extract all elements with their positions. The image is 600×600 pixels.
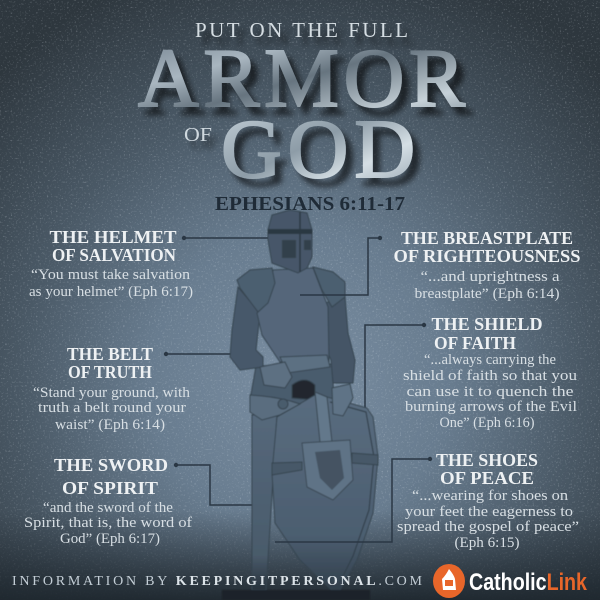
shield crest [302,440,353,500]
right hand [332,384,353,416]
quote: helmet: as your helmet” (Eph 6:17) [29,284,193,300]
lower body [250,364,334,430]
right arm [322,297,355,383]
connector: sword [176,465,255,505]
quote: belt: “Stand your ground, with [33,385,191,401]
heading line two: belt: OF TRUTH [68,362,152,382]
connector: helmet [184,237,268,239]
visor [268,229,312,234]
quote: shoes: “...wearing for shoes on [412,488,569,504]
breastplate [257,268,329,362]
panel: belt [33,344,191,433]
logo wordmark: CatholicLink [469,569,588,596]
connector dots [164,236,432,467]
quote: shield: burning arrows of the Evil [405,399,577,415]
connector: shoes [275,459,430,542]
quote: shield: can use it to quench the [406,384,574,400]
panel: shoes [397,450,579,551]
quote: breastplate: “...and uprightness a [420,269,560,285]
panel: sword [24,455,192,547]
quote: breastplate [414,269,560,302]
quote: shield: shield of faith so that you [403,368,577,384]
left arm [230,287,263,370]
quote: shoes: (Eph 6:15) [454,535,520,551]
panel: helmet [29,227,193,300]
heading line two: helmet: OF SALVATION [52,245,176,265]
footer credit: INFORMATION BY KEEPINGITPERSONAL.COM [12,574,423,589]
quote: shield: One” (Eph 6:16) [440,415,535,431]
panel: shield [403,314,577,431]
knight figure [222,210,378,600]
inner shield rim [330,402,374,588]
title word: god: GOD [221,103,415,196]
sword [252,415,277,590]
quote: shield [403,352,577,431]
title word: of: OF [184,124,212,146]
left pauldron [237,268,275,312]
quote: helmet [29,267,193,300]
heading: belt: THE BELT [67,344,153,364]
title word: armor: ARMOR [138,32,465,125]
heading: breastplate: THE BREASTPLATE [401,228,573,248]
right pauldron [313,267,345,307]
heading: shield: THE SHIELD [432,314,542,334]
heading line two: breastplate: OF RIGHTEOUSNESS [394,246,580,266]
connector lines [166,238,424,505]
connector: breastplate [300,238,380,295]
quote: sword: “and the sword of the [43,500,173,516]
panel: breastplate [394,228,580,302]
title line: put on the full: PUT ON THE FULL [195,18,408,42]
quote: sword: God” (Eph 6:17) [60,531,160,547]
quote: belt [33,385,191,433]
heading: helmet: THE HELMET [50,227,176,247]
quote: breastplate: breastplate” (Eph 6:14) [414,286,560,302]
quote: sword: Spirit, that is, the word of [24,515,192,531]
sword grip [278,399,288,409]
quote: shoes: your feet the eagerness to [405,504,573,520]
shield strap [315,392,332,442]
fauld opening [292,380,315,400]
connector overlays [275,238,430,542]
heading line two: sword: OF SPIRIT [62,478,158,498]
connector: shield [365,325,424,410]
crossguard with pommel [250,395,300,420]
visor breathing holes [282,240,311,258]
title [138,18,465,196]
quote: belt: truth a belt round your [38,400,186,416]
heading line two: shoes: OF PEACE [440,468,534,488]
shield bars [272,453,378,475]
shield [272,395,378,595]
scripture reference: EPHESIANS 6:11-17 [215,193,405,215]
quote: shoes: spread the gospel of peace” [397,519,579,535]
left hand [260,362,292,388]
heading line two: shield: OF FAITH [434,333,516,353]
quote: helmet: “You must take salvation [31,267,191,283]
connector: belt [166,354,262,363]
heading: shoes: THE SHOES [436,450,538,470]
quote: belt: waist” (Eph 6:14) [55,417,165,433]
icon: flame badge [433,564,465,598]
quote: sword [24,500,192,547]
helmet [268,210,312,273]
belt [280,355,330,373]
logo: CatholicLink [433,564,588,598]
pedestal [222,590,370,600]
heading: sword: THE SWORD [54,455,168,475]
quote: shield: “...always carrying the [424,352,556,368]
quote: shoes [397,488,579,551]
